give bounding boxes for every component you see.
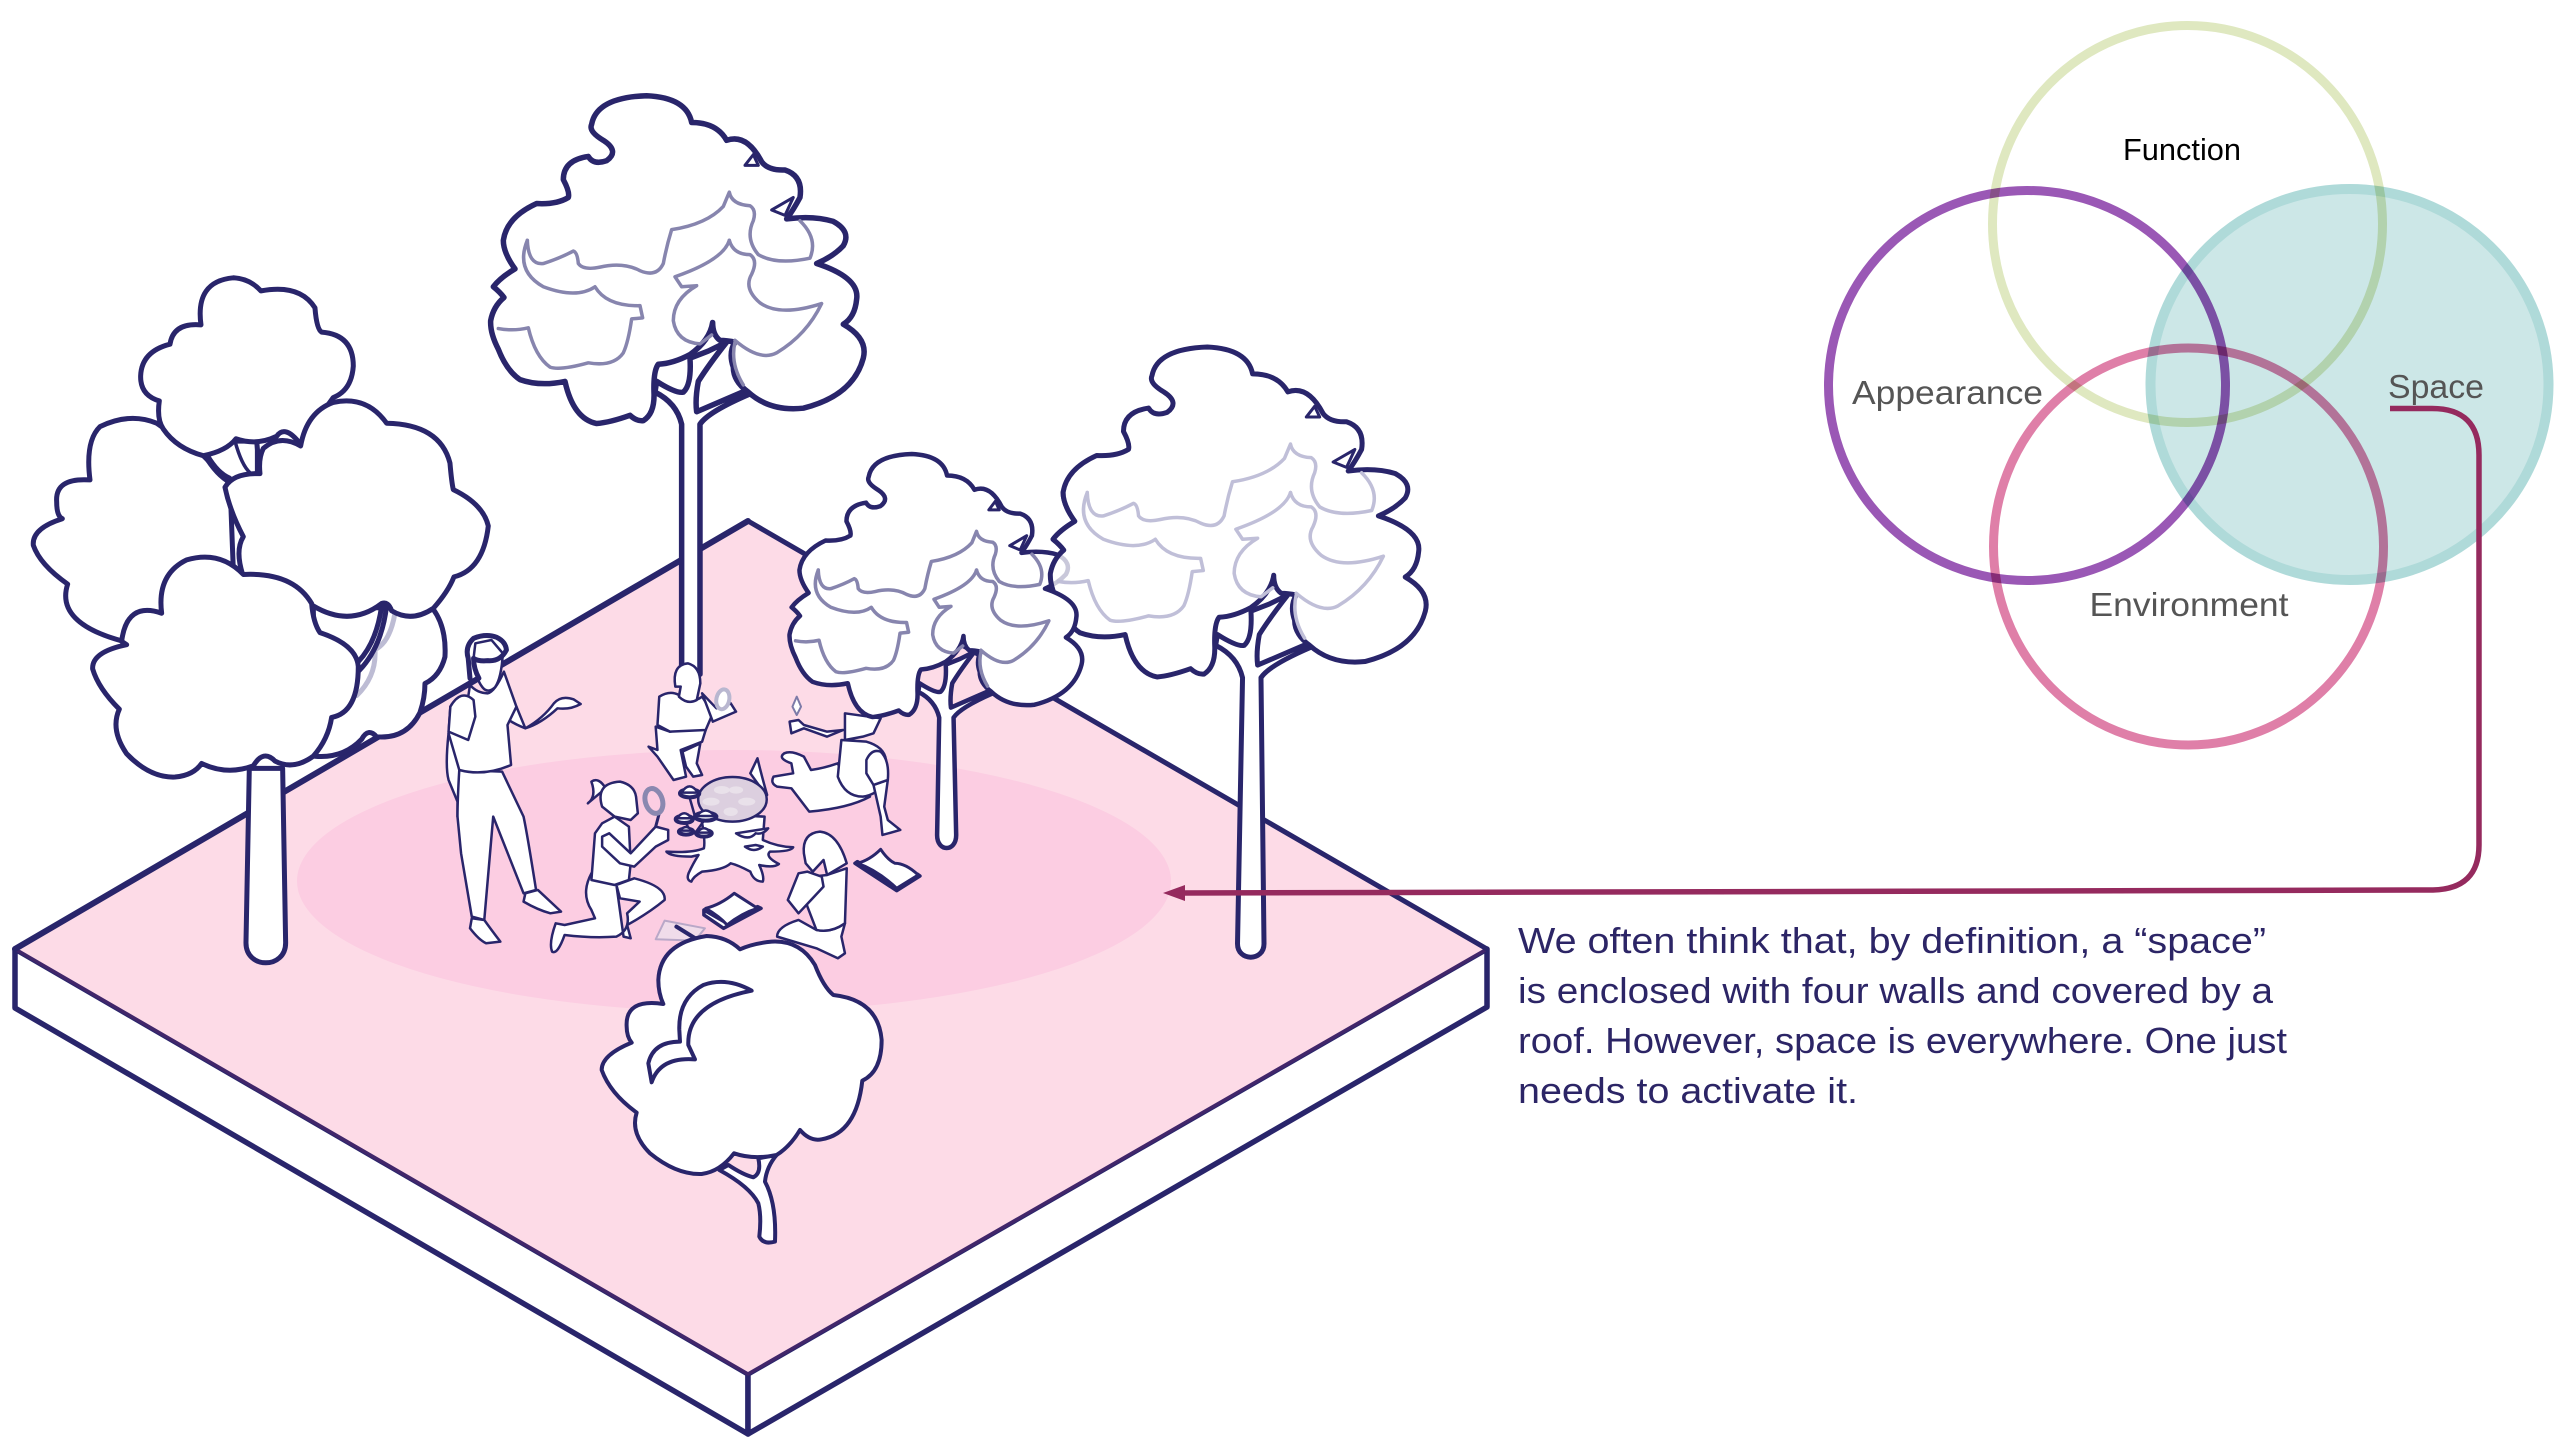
text line 1: We often think that, by definition, a “space” <box>1518 920 2266 961</box>
panel: isometric platform <box>15 521 1487 1434</box>
seated girl <box>777 832 847 958</box>
venn label: appearance: Appearance <box>1852 374 2043 411</box>
left tree top lobe <box>141 278 353 456</box>
tree: left multi-lobed tree <box>33 278 488 963</box>
venn label: environment: Environment <box>2090 586 2288 623</box>
back right platform edge <box>748 521 1487 949</box>
venn label: function: Function <box>2123 132 2241 167</box>
left tree back lobe <box>313 606 445 756</box>
left tree upper branches <box>205 441 260 482</box>
open book near stump <box>704 893 761 928</box>
text line 2: is enclosed with four walls and covered by a <box>1518 970 2274 1011</box>
front tree crescent detail <box>648 982 752 1082</box>
back left platform edge <box>15 521 748 949</box>
tree stump with mushrooms <box>666 758 793 882</box>
left tree far left lobe <box>33 418 233 641</box>
paper and pencil <box>656 921 705 941</box>
arrow from Space label to activated space <box>1163 408 2479 901</box>
tree: right tree <box>1050 347 1426 957</box>
venn circle: appearance <box>1828 190 2226 580</box>
text line 4: needs to activate it. <box>1518 1070 1858 1111</box>
open book at right <box>855 849 920 891</box>
venn circle: environment <box>1994 348 2384 745</box>
arrow head <box>1163 885 1185 901</box>
platform right side face <box>748 949 1487 1434</box>
arrow shaft <box>1180 408 2479 893</box>
venn circle: function <box>1992 26 2382 422</box>
venn diagram <box>1828 26 2548 745</box>
platform left side face <box>15 949 748 1434</box>
explanatory text <box>1518 920 2287 1111</box>
platform top surface <box>15 521 1487 1374</box>
tall tree trunk and branches <box>655 342 750 674</box>
tree: tall back tree <box>491 96 864 674</box>
right tree crown <box>1050 347 1426 677</box>
front tree trunk <box>719 1155 777 1243</box>
left tree trunk <box>246 768 286 963</box>
text line 3: roof. However, space is everywhere. One just <box>1518 1020 2287 1061</box>
centre tree crown <box>789 454 1082 717</box>
left tree hidden branches <box>357 606 395 696</box>
right tree trunk and branches <box>1216 595 1311 957</box>
tree: centre tree <box>789 454 1082 848</box>
tree: front small tree <box>602 936 882 1243</box>
tall tree crown <box>491 96 864 424</box>
people group <box>447 636 920 958</box>
sitting child with leaf <box>772 697 900 835</box>
front tree crown <box>602 936 882 1174</box>
standing teacher <box>447 636 581 943</box>
crouching child with magnifier <box>649 663 736 780</box>
left tree front lobe <box>93 557 358 777</box>
venn circle: space <box>2150 189 2548 580</box>
centre tree trunk and branches <box>918 652 993 848</box>
activated space ellipse <box>297 750 1171 1012</box>
kneeling girl with magnifier <box>551 780 668 952</box>
right tree crown overlap with centre tree <box>1048 490 1090 590</box>
left tree right lobe <box>225 401 488 616</box>
venn label: space: Space <box>2388 368 2484 405</box>
